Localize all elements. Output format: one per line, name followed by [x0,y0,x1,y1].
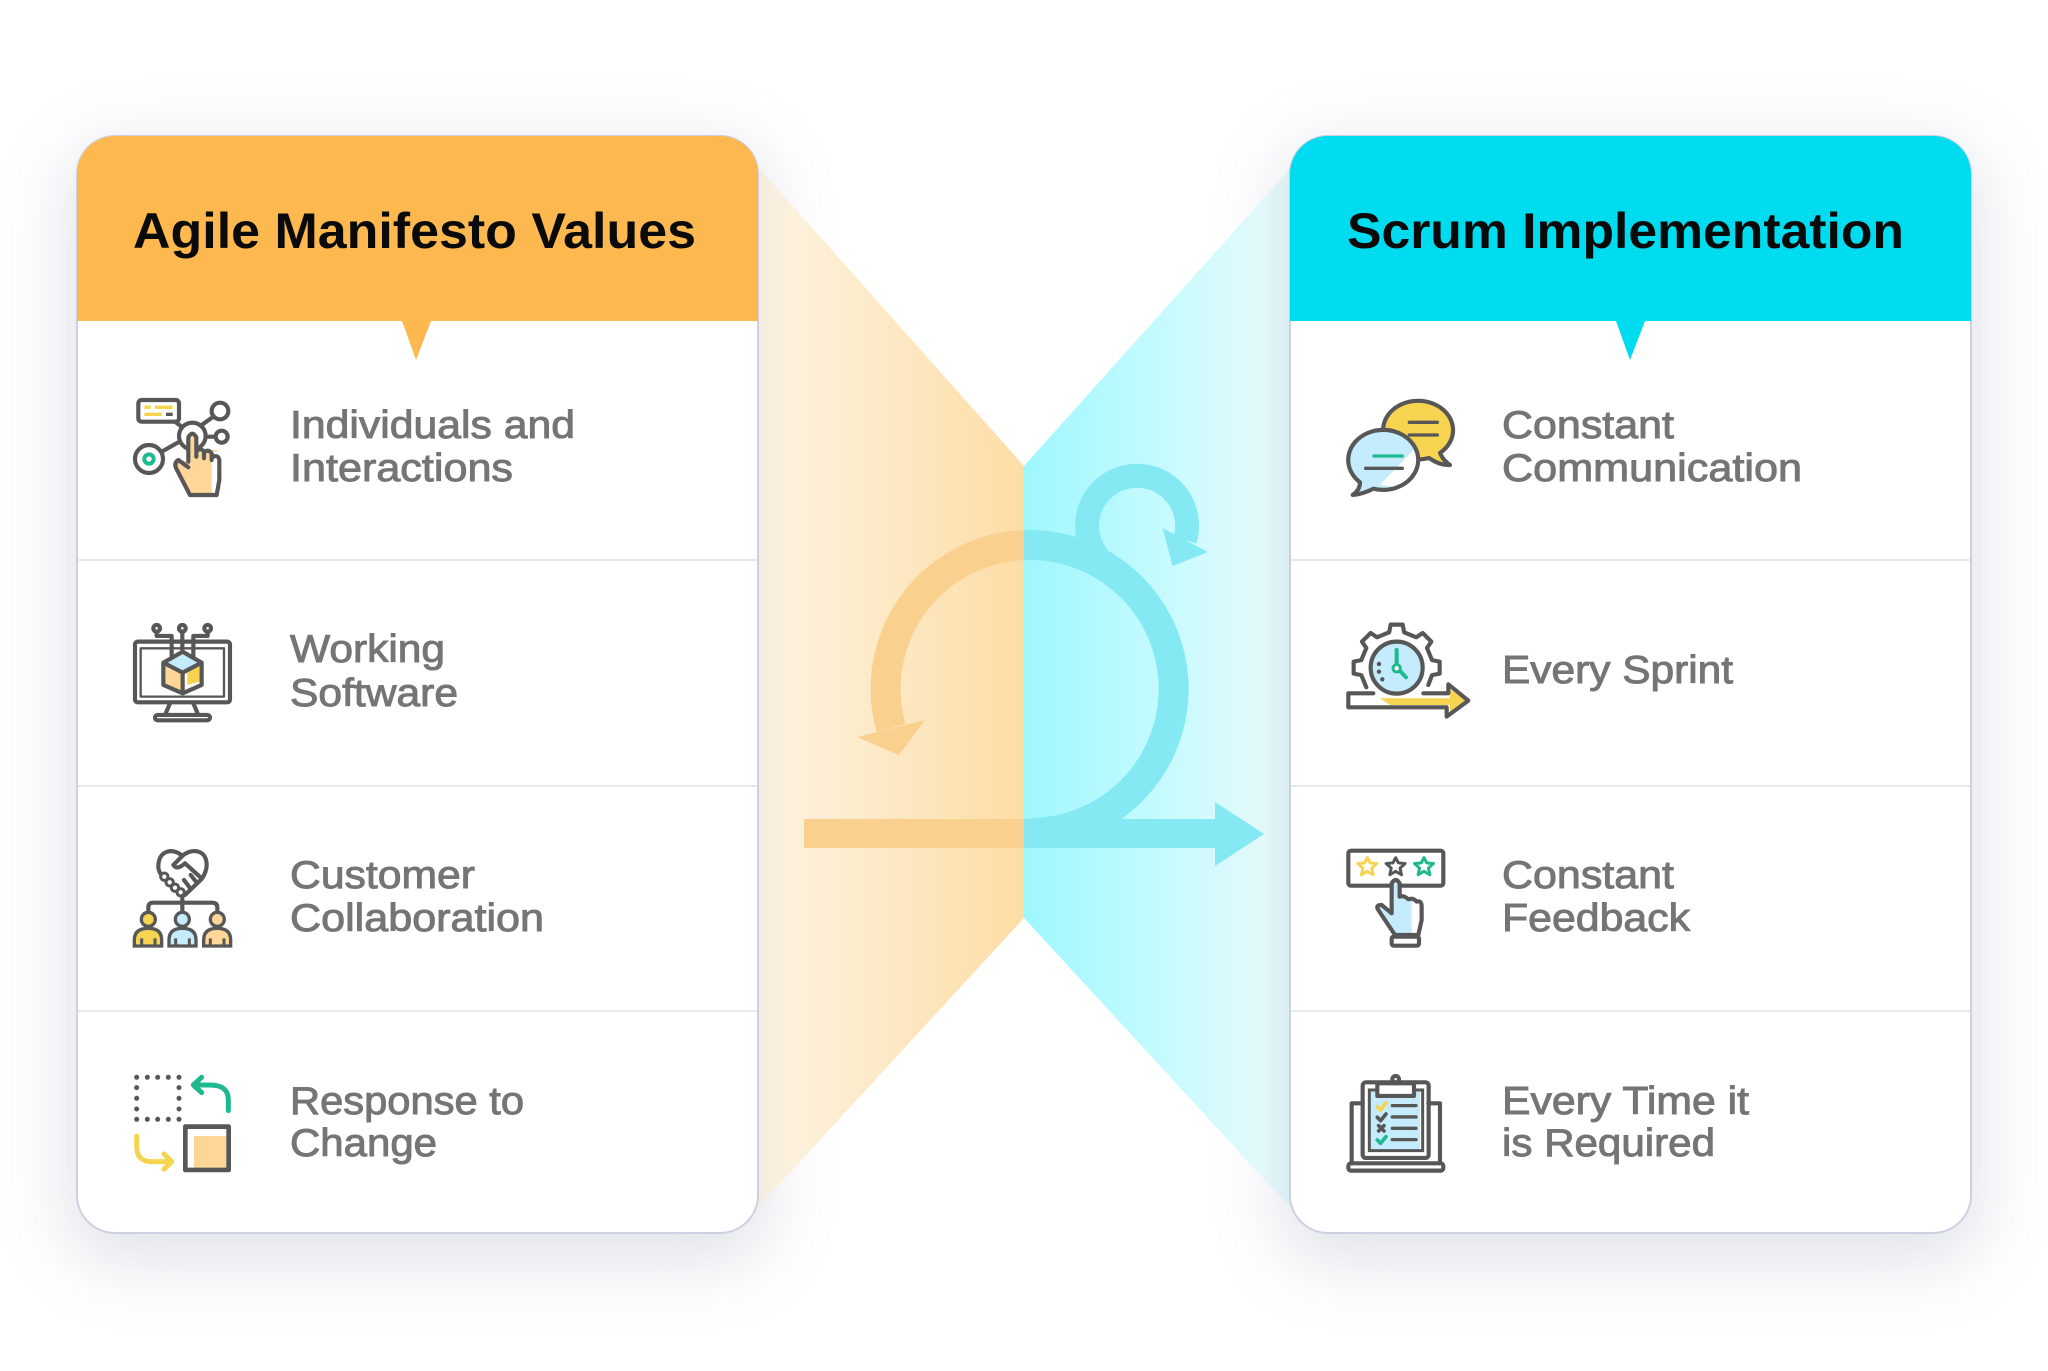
label: individuals and interactions: Individuals and [290,404,575,447]
icon: change squares and arrows [134,1075,229,1170]
icon: monitor with cube [135,625,230,720]
symbol: cyan right half [1024,464,1264,866]
label: response to change: Change [290,1122,437,1165]
label: customer collaboration: Collaboration [290,897,544,940]
scrum cycle symbol [804,476,1264,866]
label: response to change: Response to [290,1080,524,1123]
funnel: agile side [750,158,1024,1216]
label: response to change [290,1080,524,1165]
heading: scrum: Scrum Implementation [1347,203,1904,259]
icon: speech bubbles [1348,401,1453,495]
label: constant communication [1502,404,1802,490]
icon: handshake heart and people [134,851,231,946]
label: every sprint: Every Sprint [1502,649,1733,692]
heading: agile: Agile Manifesto Values [133,203,696,259]
panel: scrum implementation [1290,136,1971,1233]
label: constant feedback [1502,854,1691,940]
label: individuals and interactions: Interactions [290,447,513,490]
header band: agile [77,136,758,360]
icon: network touch hand [135,400,228,495]
icon: star rating with hand [1348,851,1443,946]
panel: agile manifesto values [77,136,758,1233]
label: working software [290,628,458,715]
label: customer collaboration: Customer [290,854,475,897]
label: constant communication: Communication [1502,447,1802,490]
label: constant communication: Constant [1502,404,1674,447]
label: every time it is required: is Required [1502,1122,1715,1165]
icon: gear clock and arrow [1348,625,1468,717]
icon: checklist clipboard on laptop [1348,1076,1443,1171]
symbol: orange left half [804,530,1024,848]
label: working software: Working [290,628,445,671]
label: constant feedback: Constant [1502,854,1674,897]
label: constant feedback: Feedback [1502,897,1691,940]
card shadows [70,150,1978,1260]
label: every time it is required: Every Time it [1502,1080,1749,1123]
funnel: scrum side [1024,160,1298,1216]
header band: scrum [1290,136,1971,360]
label: customer collaboration [290,854,544,940]
label: working software: Software [290,672,458,715]
label: every time it is required [1502,1080,1749,1165]
label: individuals and interactions [290,404,575,490]
